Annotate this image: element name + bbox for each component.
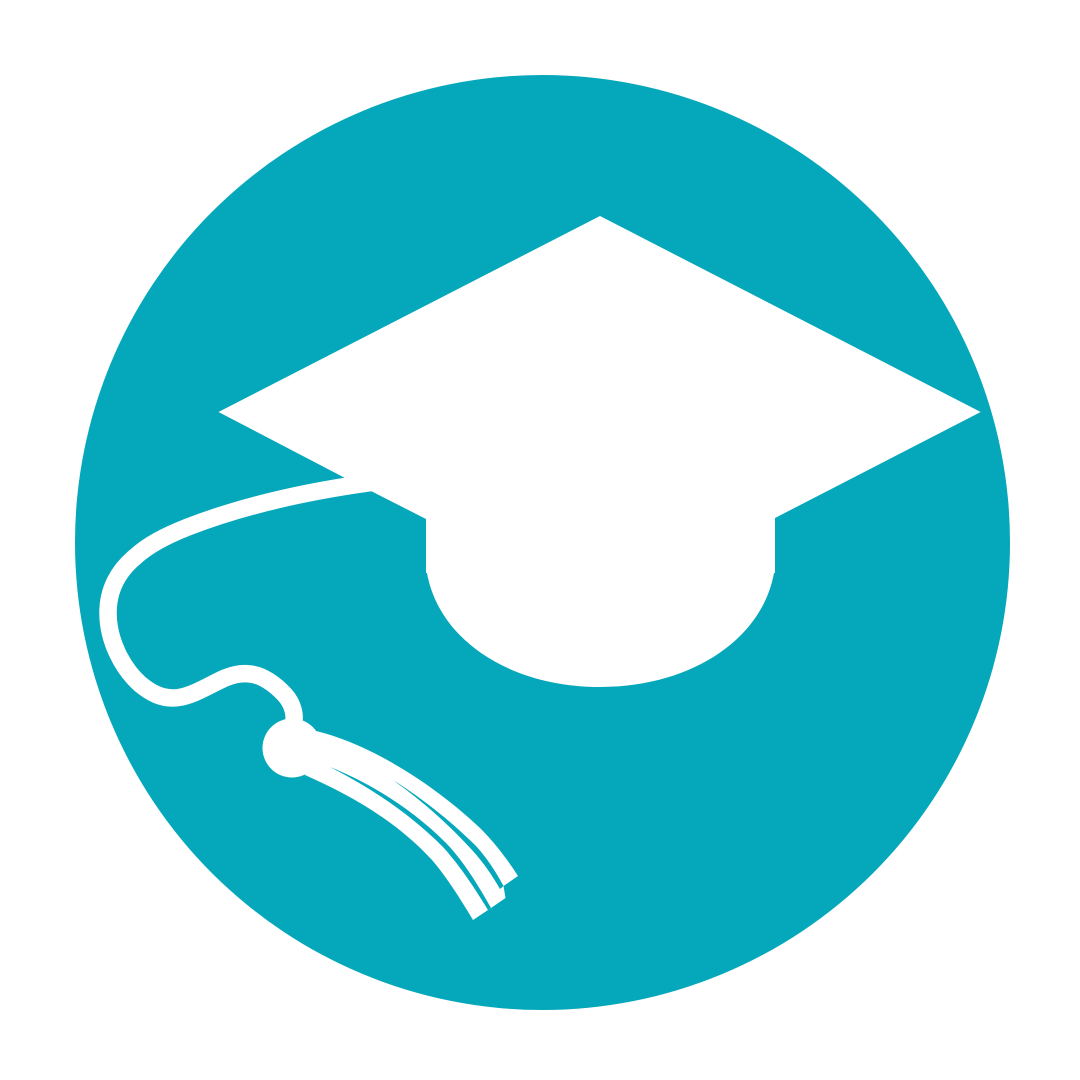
tassel knot xyxy=(262,718,322,778)
tassel strands xyxy=(305,731,518,920)
teal circle background xyxy=(75,75,1010,1010)
gap between lower strands xyxy=(330,767,491,910)
gap between upper strands xyxy=(393,780,504,889)
strands body xyxy=(305,731,518,920)
icon: graduation cap xyxy=(108,216,981,920)
tassel cord xyxy=(108,480,385,725)
mortarboard and cap base xyxy=(218,216,981,687)
